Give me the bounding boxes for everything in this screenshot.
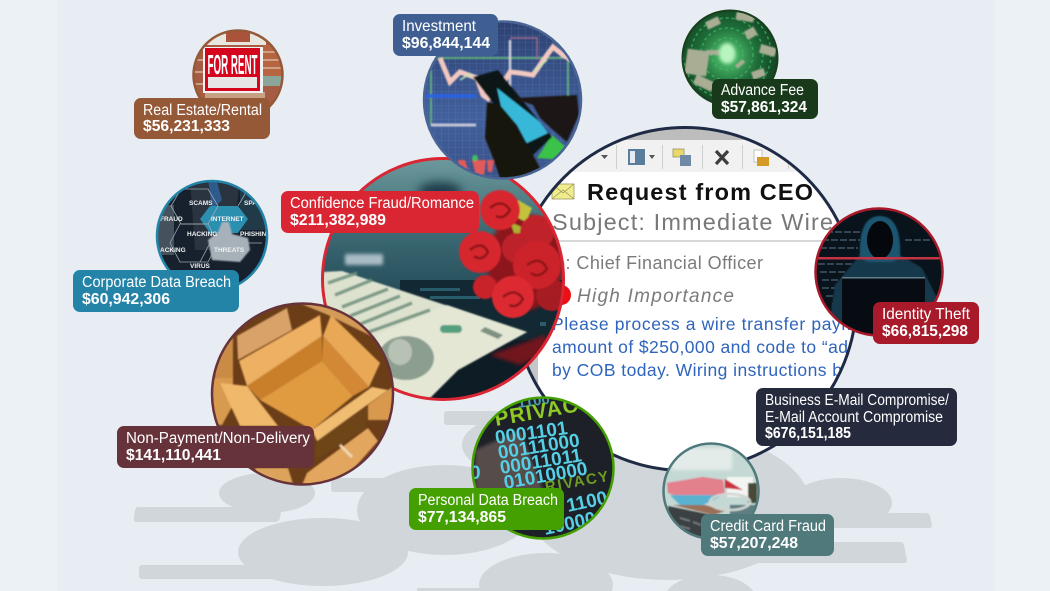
label: investment [393,14,498,56]
ring [157,181,267,291]
label: confidence fraud/romance: Confidence Fraud/Romance [290,195,474,212]
photo: trading chart and phone [425,22,580,178]
photo: binary privacy screen: 1100 [565,488,609,517]
network words: INTERNET [211,216,244,223]
network words: VIRUS [190,263,211,270]
label: identity theft [873,302,979,344]
ring [816,208,942,336]
network words: THREATS [214,247,245,254]
label: real estate/rental [134,98,270,139]
panel: advance fee [680,8,780,108]
label: identity theft: Identity Theft [882,306,971,323]
label: real estate/rental: Real Estate/Rental [143,102,262,119]
ground shadows [134,411,932,591]
photo: binary privacy screen: 10000 [542,508,598,540]
email heading: Request from CEO [587,179,813,205]
panel: credit card fraud [662,442,760,539]
network words: ACKING [160,247,186,254]
high importance text: High Importance [577,286,734,307]
email body: Please process a wire transfer paym [552,314,856,334]
label: investment: $96,844,144 [402,35,490,52]
label: corporate data breach: $60,942,306 [82,291,170,308]
label: advance fee: $57,861,324 [721,99,807,116]
network words: PHISHING [240,231,271,238]
label: real estate/rental: $56,231,333 [143,118,230,135]
label: identity theft: $66,815,298 [882,323,968,340]
panel: corporate data breach [156,180,268,286]
panel: non-payment/non-delivery [210,300,396,490]
ring [424,22,581,178]
panel: business e-mail compromise [510,120,862,475]
panel: confidence fraud/romance [320,155,570,405]
label: advance fee: Advance Fee [721,82,804,99]
network words [160,200,271,270]
label: credit card fraud [701,514,834,556]
ring [514,128,856,470]
label: business e-mail compromise [756,388,957,446]
ring [682,10,778,106]
network words: SPA [244,200,257,207]
panel: identity theft [814,207,944,336]
label: advance fee [712,79,818,119]
ring [472,398,614,538]
email screenshot photo [528,129,852,468]
photo: hex network [158,182,266,282]
label: corporate data breach: Corporate Data Breach [82,274,231,291]
photo: binary privacy screen: 01010000 [502,459,589,494]
photo: credit cards and keyboard [665,444,758,536]
photo: binary privacy screen: 00111000 [496,430,581,464]
photo: binary privacy screen: 0001101 [494,418,569,449]
label: non-payment/non-delivery [117,426,314,468]
label: investment: Investment [402,18,477,35]
email body: amount of $250,000 and code to “ad [552,337,848,357]
photo: binary privacy screen [474,398,612,538]
label: business e-mail compromise: E-Mail Account Compromise [765,409,943,426]
email subject: Subject: Immediate Wire [552,209,833,235]
label: personal data breach: $77,134,865 [418,509,506,526]
label: credit card fraud: $57,207,248 [710,535,798,552]
label: confidence fraud/romance [281,191,479,233]
label: personal data breach: Personal Data Breach [418,492,558,509]
photo: binary privacy screen: RIVACY [544,468,610,496]
email recipient: o: Chief Financial Officer [555,253,763,273]
photo: binary privacy screen: 1100 [516,391,551,412]
photo: binary privacy screen: 00011011 [498,445,584,479]
network words: FRAUD [160,216,183,223]
label: confidence fraud/romance: $211,382,989 [290,212,386,229]
photo: for rent sign: FOR RENT [208,49,258,80]
photo: binary privacy screen: 0 [470,463,481,484]
ring [194,30,282,120]
label: non-payment/non-delivery: $141,110,441 [126,447,221,464]
photo: roses and money [320,155,570,405]
label: credit card fraud: Credit Card Fraud [710,518,826,535]
ring [664,444,758,538]
ring [322,158,564,400]
panel: investment [420,18,585,183]
photo: binary privacy screen: PRIVAC [493,394,580,431]
label: business e-mail compromise: Business E-Mail Compromise/ [765,392,950,409]
network words: SCAMS [189,200,213,207]
panel: real estate/rental [192,29,284,108]
label: non-payment/non-delivery: Non-Payment/Non-Delivery [126,430,310,447]
ring [212,304,393,484]
label: corporate data breach [73,270,239,312]
network words: HACKING [187,231,217,238]
icon: envelope [552,184,574,199]
photo: hooded hacker [816,210,942,334]
photo: open cardboard box [210,300,396,490]
email body [552,314,856,380]
photo: money tunnel [684,12,776,101]
label: personal data breach [409,488,564,530]
icon: high importance [562,286,571,305]
toolbar [601,145,789,169]
label: business e-mail compromise: $676,151,185 [765,425,851,442]
email body: by COB today. Wiring instructions b [552,360,842,380]
panel: personal data breach [470,391,618,543]
